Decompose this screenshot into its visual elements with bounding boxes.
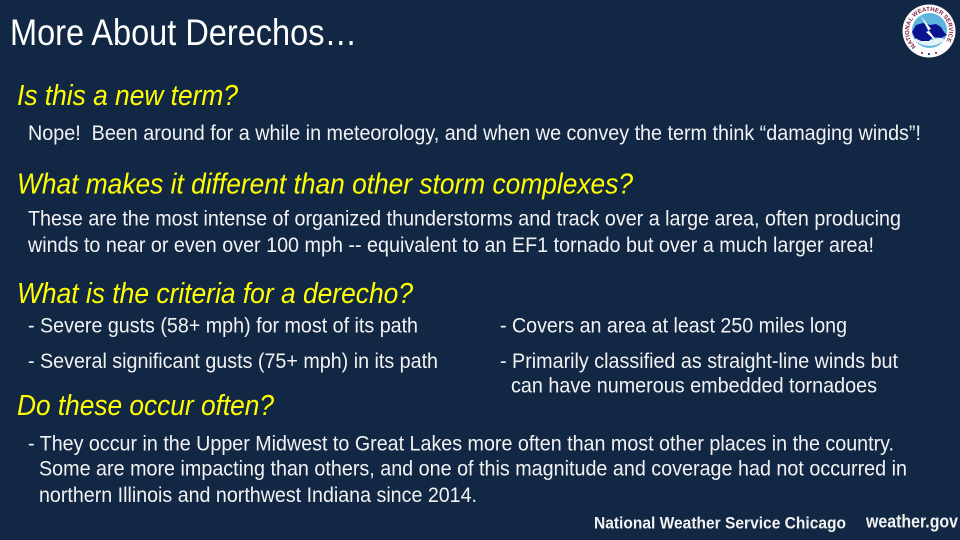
icon: NWS logo: NATIONAL WEATHER SERVICE	[904, 6, 954, 50]
text block: frequency answer: Some are more impacting than others, and one of this magnitude and coverage had not occurred in	[39, 458, 907, 480]
text block: criteria right: - Covers an area at least 250 miles long	[500, 314, 847, 338]
text block: criteria left	[28, 314, 438, 373]
heading: occur often: Do these occur often?	[17, 390, 275, 422]
heading: new term: Is this a new term?	[17, 80, 239, 112]
text block: criteria right: - Primarily classified as straight-line winds but	[500, 350, 898, 373]
text block: difference answer	[27, 208, 901, 257]
footer: office name: National Weather Service Chicago	[594, 514, 846, 532]
text block: criteria left: - Severe gusts (58+ mph) for most of its path	[28, 314, 418, 338]
text block: criteria right: can have numerous embedded tornadoes	[511, 374, 877, 398]
text block: frequency answer: northern Illinois and northwest Indiana since 2014.	[39, 484, 477, 507]
heading: criteria: What is the criteria for a derecho?	[17, 278, 414, 310]
text block: frequency answer	[28, 432, 907, 507]
text block: new term answer: Nope! Been around for a while in meteorology, and when we convey the term think “damaging winds”!	[28, 122, 921, 145]
text block: frequency answer: - They occur in the Upper Midwest to Great Lakes more often than most other places in the country.	[28, 432, 894, 456]
text block: criteria left: - Several significant gusts (75+ mph) in its path	[28, 350, 438, 373]
text block: difference answer: These are the most intense of organized thunderstorms and track over a large area, often producing	[28, 208, 901, 230]
text block: difference answer: winds to near or even over 100 mph -- equivalent to an EF1 tornado but over a much larger area!	[27, 234, 874, 257]
title: More About Derechos…	[10, 11, 357, 53]
text block: criteria right	[500, 314, 898, 398]
heading: what makes it different: What makes it different than other storm complexes?	[17, 168, 634, 200]
